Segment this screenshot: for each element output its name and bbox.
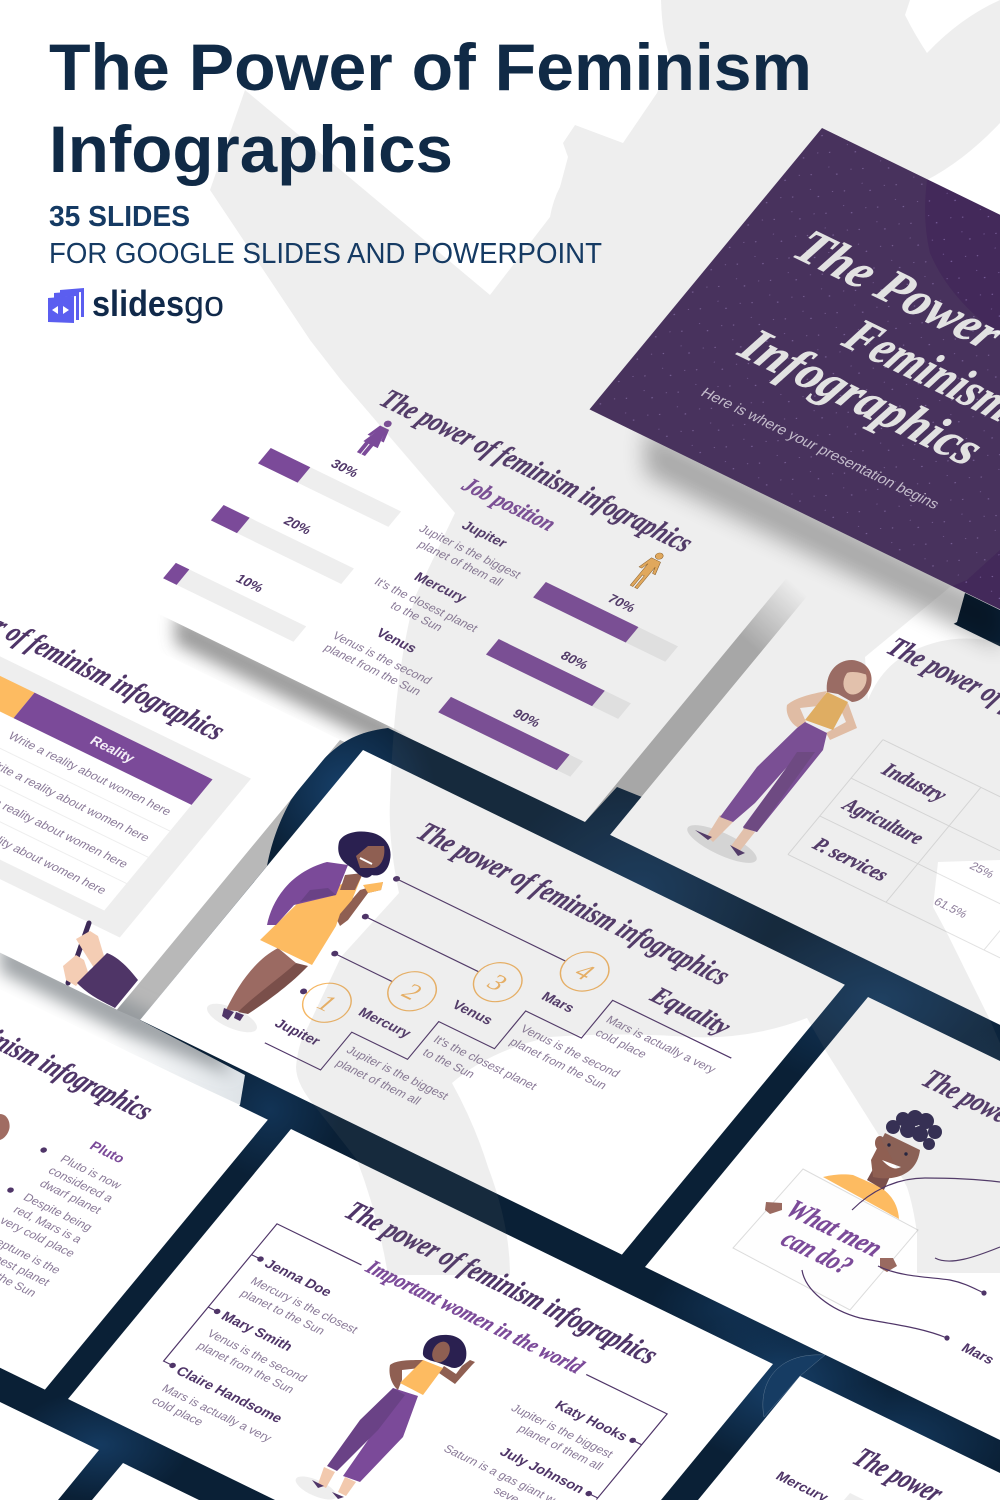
curved connectors	[802, 1178, 1000, 1340]
header text: Reality	[87, 733, 139, 765]
bullet list: dwarf planet	[37, 1177, 105, 1217]
slide: pluto list	[0, 885, 268, 1390]
people left: Claire Handsome	[173, 1363, 286, 1426]
circle numbers: 2	[397, 978, 427, 1006]
people left: Mercury is the closest	[248, 1274, 361, 1336]
slide: bottom right	[773, 1420, 950, 1500]
descriptions: Mars is actually a very	[603, 1013, 719, 1076]
planet texts: Jupiter is the biggest	[416, 522, 525, 581]
slide: reality table	[0, 505, 340, 1010]
planet labels: Mercury	[355, 1004, 415, 1041]
cover subtitle: Here is where your presentation begins	[697, 385, 943, 512]
table labels: Industry	[877, 758, 952, 806]
grey block	[844, 1493, 864, 1500]
planet texts: Jupiter	[459, 517, 511, 550]
title: The power of feminism infographics	[410, 817, 737, 991]
descriptions: to the Sun	[420, 1046, 478, 1081]
title: The power of feminism infographics	[338, 1196, 665, 1370]
icon: slidesgo logo	[48, 288, 84, 323]
descriptions: It's the closest planet	[431, 1033, 541, 1093]
planet texts: Venus is the second	[329, 629, 435, 687]
descriptions: cold place	[592, 1026, 650, 1061]
background silhouette overlay	[210, 0, 1000, 1275]
planet texts: Venus	[373, 625, 421, 656]
woman waving	[293, 1335, 475, 1500]
slide: bottom right background	[698, 1376, 1000, 1500]
cover title	[709, 220, 1000, 481]
table values: 61.5%	[931, 895, 971, 921]
right bracket	[515, 1374, 667, 1500]
title: The power of feminism infographics	[373, 384, 700, 558]
planet texts: planet of them all	[415, 538, 506, 589]
people right: Katy Hooks	[552, 1397, 632, 1444]
band between reality slide and pluto slide	[100, 1020, 245, 1105]
grey band between job slide and right slide	[585, 552, 833, 835]
people right: July Johnson	[497, 1444, 588, 1496]
slide: job position	[103, 317, 808, 822]
slide: bottom left blank	[0, 1402, 99, 1500]
people left: planet to the Sun	[237, 1287, 328, 1337]
navy corner accent	[763, 1355, 825, 1417]
cover shadow	[645, 428, 1000, 648]
woman with yellow dress	[203, 831, 391, 1038]
right bars: 80%	[558, 649, 591, 672]
shadow band: job slide bottom	[175, 612, 395, 752]
left bars: 20%	[281, 514, 315, 537]
staircase line	[265, 892, 731, 1209]
right bars: 90%	[510, 706, 544, 730]
table white rows	[0, 631, 192, 910]
subtitle: Job position	[457, 473, 561, 535]
slide: what men can do	[773, 1064, 1000, 1411]
sign	[733, 1169, 918, 1310]
connector lines	[300, 876, 567, 1076]
people left: cold place	[149, 1394, 207, 1429]
right bars	[438, 565, 692, 777]
left bars: 10%	[233, 571, 267, 595]
people left: planet from the Sun	[194, 1339, 297, 1396]
logo wordmark: go	[184, 283, 224, 324]
descriptions: Jupiter is the biggest	[344, 1043, 452, 1103]
circle numbers: 3	[481, 968, 513, 997]
slide: equality	[140, 750, 845, 1255]
pluto heading: Pluto	[87, 1138, 128, 1166]
reality rows	[0, 639, 185, 902]
people left: Mars is actually a very	[159, 1382, 275, 1444]
circle numbers: 4	[569, 958, 599, 986]
descriptions	[333, 932, 719, 1201]
planet labels: Jupiter	[272, 1015, 324, 1048]
purple header	[14, 693, 213, 805]
table panel	[0, 581, 251, 937]
label mars: Mars	[958, 1340, 998, 1367]
people left: Jenna Doe	[262, 1256, 336, 1299]
people right: Jupiter is the biggest	[508, 1401, 617, 1461]
slide: bottom blank	[92, 1463, 199, 1500]
logo wordmark: slides	[92, 283, 184, 324]
sign text: What men	[779, 1195, 889, 1263]
icon: hands holding stick	[63, 923, 138, 1008]
planet texts: to the Sun	[388, 599, 446, 634]
main title: The Power of Feminism	[49, 30, 812, 104]
people left: Mary Smith	[218, 1308, 296, 1354]
left bars: 30%	[328, 457, 362, 480]
icon: purple figure	[354, 417, 398, 459]
bullet list: Pluto is now	[57, 1152, 125, 1192]
planet texts	[318, 503, 541, 700]
people left: Venus is the second	[204, 1327, 310, 1385]
orange header	[0, 606, 35, 718]
reality rows: Write a reality about women here	[5, 729, 175, 818]
slide: table with woman	[610, 565, 1000, 1070]
table labels: P. services	[807, 832, 894, 886]
sign text	[760, 1195, 889, 1286]
slide: what men can do background	[645, 997, 1000, 1440]
bullet list: red, Mars is a	[11, 1203, 85, 1246]
woman with hands on hips	[683, 660, 872, 870]
planet labels: Venus	[449, 997, 497, 1028]
planet labels: Mars	[539, 989, 578, 1015]
people right	[431, 1371, 632, 1500]
grey band between reality slide and equality slide	[117, 740, 363, 1020]
shadow under reality slide	[0, 940, 232, 1075]
left bracket	[162, 1224, 361, 1404]
descriptions: planet from the Sun	[507, 1035, 610, 1092]
main title: Infographics	[49, 112, 453, 186]
left bars	[163, 431, 415, 642]
numbered circles	[293, 864, 618, 1110]
people right: planet of them all	[515, 1422, 606, 1473]
circle numbers	[312, 877, 599, 1098]
subtitle: Equality	[644, 981, 737, 1040]
platform line: FOR GOOGLE SLIDES AND POWERPOINT	[49, 238, 602, 270]
slide: important women background	[68, 1129, 773, 1500]
bullet list: Despite being	[20, 1191, 95, 1234]
sign text: can do?	[775, 1225, 859, 1280]
navy backing	[0, 593, 1000, 1500]
descriptions: planet of them all	[333, 1056, 424, 1107]
planet labels	[272, 904, 578, 1127]
main title	[49, 30, 812, 186]
table labels	[805, 754, 961, 887]
table values: 25%	[967, 859, 997, 881]
subtitle: Important women in the world	[360, 1255, 590, 1378]
bullet list: considered a	[45, 1164, 116, 1205]
planet texts: It's the closest planet	[371, 575, 481, 635]
planet texts: Mercury	[411, 569, 471, 605]
man holding sign	[733, 1110, 942, 1310]
table grid	[788, 740, 1000, 1006]
people left	[149, 1256, 379, 1457]
icon: skin shape at left edge	[0, 1114, 10, 1140]
table values	[931, 857, 1000, 921]
table labels: Agriculture	[837, 793, 929, 849]
circle numbers: 1	[312, 989, 342, 1017]
slide: cover	[589, 128, 1000, 681]
descriptions: Venus is the second	[518, 1022, 623, 1080]
bullet list	[0, 1143, 132, 1301]
slide: important women	[134, 1175, 707, 1500]
slide count: 35 SLIDES	[49, 201, 190, 233]
right bars: 70%	[605, 592, 639, 615]
planet texts: planet from the Sun	[321, 641, 424, 698]
icon: orange figure	[626, 549, 670, 591]
